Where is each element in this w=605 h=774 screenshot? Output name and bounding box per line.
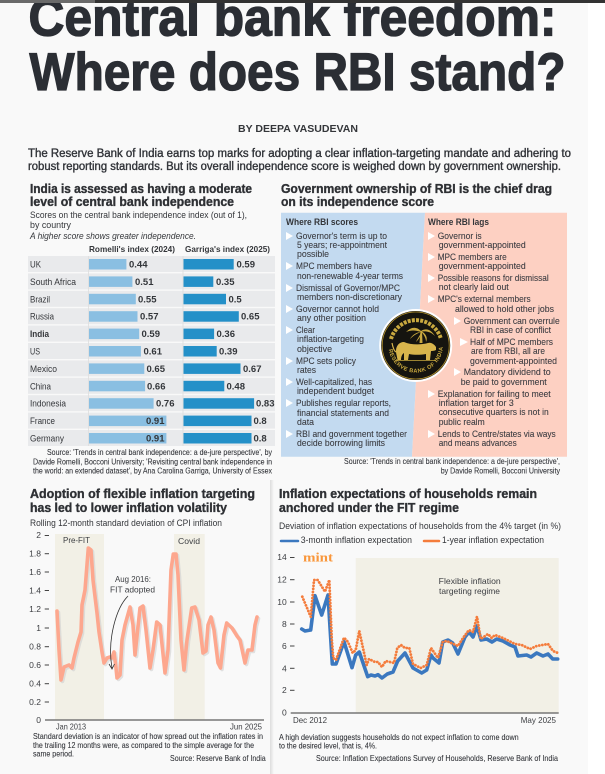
panel: where RBI scores: Governor cannot hold [296,304,379,315]
bar chart: country scores: 0.48 [226,381,245,392]
panel: where RBI scores: objective [297,344,332,355]
logo: mint: mint [303,550,334,564]
panel: where RBI lags: Where RBI lags [428,217,489,228]
line chart: CPI volatility: 1.8 [29,548,41,558]
panel: where RBI lags: are from RBI, all are [471,346,545,357]
callout: FIT adopted: Aug 2016: [115,574,151,584]
bar chart: country scores: 0.59 [236,260,255,270]
bar chart: country scores: South Africa [30,277,76,287]
panel: where RBI lags: Possible reasons for dismissal [438,273,549,284]
subtitle: Scores on the central bank independence index (out of 1), [30,210,247,220]
panel: where RBI scores [281,213,425,457]
heading: independence index: India is assessed as having a moderate [30,181,252,196]
panel: where RBI lags: not clearly laid out [439,282,509,293]
bar chart: country scores: Indonesia [30,399,66,409]
label: regime: targeting regime [439,586,500,596]
panel: where RBI lags: MPC members are [438,252,507,263]
panel: where RBI scores: members non-discretionary [297,292,402,303]
note: standard deviation: same period. [33,750,74,758]
line chart: CPI volatility: Pre-FIT [63,535,90,545]
note: standard deviation [33,732,263,758]
panel: where RBI scores: MPC members have [296,261,372,272]
column headers: Romelli's index (2024) [89,244,175,254]
source: index: Davide Romelli, Bocconi University; 'Revisiting central bank independence in [33,458,272,466]
callout: FIT adopted [110,574,155,595]
line chart: household expectations: 0 [282,707,287,717]
legend [281,535,544,545]
panel: where RBI lags: public realm [439,417,485,428]
panel: where RBI scores: Where RBI scores [286,217,358,228]
line chart: household expectations: May 2025 [521,715,556,725]
bar chart: country scores: 0.36 [216,329,235,340]
panel: where RBI lags: Government can overrule [464,316,560,327]
bar chart: country scores: China [30,381,51,391]
heading: independence index [30,181,252,209]
bar chart: country scores: Brazil [30,294,50,304]
panel: where RBI scores: Well-capitalized, has [296,377,372,388]
line chart: CPI volatility: 0.8 [29,642,41,652]
panel: inflation volatility [29,486,266,763]
bar chart: country scores [28,256,275,446]
line chart: household expectations: 12 [277,575,287,585]
panel: where RBI scores: 5 years; re-appointment [297,240,387,251]
line chart: household expectations: 8 [282,619,287,629]
bar chart: country scores: 0.66 [147,381,166,392]
bar chart: country scores: 0.65 [146,364,166,375]
note: high deviation: to the desired level, that is, 4%. [279,742,377,750]
panel: where RBI lags: government-appointed [439,261,526,272]
bar chart: country scores: 0.35 [216,277,235,288]
bar chart: country scores: 0.57 [140,312,158,323]
heading: government ownership: on its independence score [281,194,434,209]
panel: where RBI scores: Dismissal of Governor/MPC [296,283,400,294]
line chart: CPI volatility: 0 [36,715,41,725]
line chart: CPI volatility [29,530,264,732]
bar chart: country scores: 0.8 [254,416,267,427]
column headers: Garriga's index (2025) [185,244,270,254]
panel: where RBI scores: Clear [296,325,315,336]
bar chart: country scores: 0.91 [146,416,165,427]
source: index: Source: 'Trends in central bank independence: a de-jure perspective', by [47,448,272,457]
bar chart: country scores: Russia [30,312,54,322]
bar chart: country scores: 0.8 [254,434,267,444]
legend: 3-month inflation expectation [301,535,412,545]
panel: where RBI lags: Governor is [438,231,482,242]
intro text: robust reporting standards. But its overall independence score is weighed down by government ownership. [28,161,561,173]
source: ownership: by Davide Romelli, Bocconi University [441,467,560,476]
heading: inflation volatility: Adoption of flexible inflation targeting [30,486,255,501]
subtitle: A higher score shows greater independence. [29,231,196,241]
line chart: household expectations: 2 [282,685,287,695]
panel: where RBI lags: MPC's external members [438,294,531,305]
column headers [89,244,270,254]
source: survey: Source: Inflation Expectations Survey of Households, Reserve Bank of India [316,754,558,763]
byline: BY DEEPA VASUDEVAN [238,123,358,135]
icon: RBI emblem: RESERVE BANK OF INDIA [388,347,443,373]
bar chart: country scores: 0.5 [228,294,242,305]
bar chart: country scores: UK [30,260,41,270]
line chart: CPI volatility: 1.2 [29,604,41,614]
panel: where RBI lags: Half of MPC members [470,337,553,348]
line chart: CPI volatility: 1.4 [29,586,41,596]
subtitle: Deviation of inflation expectations of households from the 4% target (in %) [279,521,561,531]
source: index [33,448,272,476]
panel: independence index [28,181,275,476]
heading: government ownership: Government ownership of RBI is the chief drag [281,181,552,196]
heading: independence index: level of central bank independence [30,194,234,209]
callout: FIT adopted: FIT adopted [110,585,155,595]
line chart: CPI volatility: 2 [36,530,41,540]
icon: RBI emblem [379,309,452,382]
bar chart: country scores: 0.67 [243,364,262,375]
source: ownership: Source: 'Trends in central bank independence: a de-jure perspective', [344,457,560,466]
bar chart: country scores: US [30,346,40,356]
bar chart: country scores: 0.76 [156,399,174,410]
label: regime: Flexible inflation [439,576,501,586]
panel: where RBI scores: non-renewable 4-year terms [297,271,403,282]
note: high deviation: A high deviation suggests households do not expect inflation to come down [279,733,519,742]
panel: where RBI lags: and means advances [439,438,517,449]
panel: where RBI scores: RBI and government together [296,429,407,440]
intro text [28,148,571,173]
arrow: FIT adoption [109,596,128,669]
line chart: household expectations: 6 [282,641,287,651]
subtitle: Rolling 12-month standard deviation of CPI inflation [30,518,222,528]
subtitle: by country [30,220,71,230]
panel: where RBI lags: government-appointed [470,356,557,367]
panel: where RBI scores: MPC sets policy [296,356,356,367]
bar chart: country scores: 0.59 [142,329,160,340]
intro text: The Reserve Bank of India earns top marks for adopting a clear inflation-targeting mandate and adhering to [28,148,571,160]
panel: where RBI lags: inflation target for 3 [439,398,514,409]
line chart: CPI volatility: Covid [178,536,200,546]
source: index: the world: an extended dataset', by Ana Carolina Garriga, University of Essex [33,466,272,476]
panel: where RBI lags: be paid to government [461,377,547,388]
panel: where RBI lags: government-appointed [439,240,526,251]
panel: where RBI scores: rates [297,365,316,376]
bar chart: country scores: 0.39 [219,346,238,358]
bar chart: country scores: 0.44 [129,260,148,270]
note: high deviation [279,733,519,750]
heading: inflation expectations [279,486,537,515]
subtitle [29,210,247,241]
line chart: CPI volatility: 0.6 [29,660,41,670]
panel: where RBI lags: Explanation for failing to meet [438,389,551,400]
legend: 1-year inflation expectation [442,535,544,545]
bar chart: country scores: 0.83 [256,399,274,410]
panel: where RBI scores: inflation-targeting [297,334,364,345]
panel: where RBI scores: possible [297,249,329,260]
bar chart: country scores: India [30,329,50,339]
line chart: CPI volatility: 1 [36,623,41,633]
heading: inflation expectations: anchored under the FIT regime [279,500,459,515]
panel: where RBI lags: allowed to hold other jobs [455,304,554,315]
line chart: household expectations: Dec 2012 [293,715,327,725]
line chart: CPI volatility: Jan 2013 [56,722,86,732]
line chart: household expectations: 4 [282,663,287,673]
line chart: household expectations [277,552,559,725]
panel: where RBI scores: independent budget [297,386,374,397]
panel: inflation expectations [277,486,561,763]
title [28,0,566,102]
note: standard deviation: the trailing 12 months were, as compared to the simple average for the [33,741,254,750]
line chart: CPI volatility: 0.4 [29,678,41,688]
line chart: household expectations: 10 [277,597,287,607]
panel: where RBI lags: RBI in case of conflict [470,325,551,336]
source: ownership [344,457,560,476]
heading: government ownership [281,181,552,209]
heading: inflation expectations: Inflation expectations of households remain [279,486,537,501]
bar chart: country scores: 0.55 [138,294,157,305]
heading: inflation volatility: has led to lower inflation volatility [30,500,228,515]
line chart: CPI volatility: 0.2 [29,697,41,707]
panel: where RBI scores: Governor's term is up to [296,231,387,242]
panel: where RBI lags [412,213,567,457]
bar chart: country scores: 0.65 [241,312,260,323]
panel: where RBI scores: financial statements and [297,408,389,419]
panel: where RBI lags: Lends to Centre/states via ways [438,429,556,440]
panel: where RBI scores: decide borrowing limits [297,438,385,449]
heading: inflation volatility [30,486,255,515]
panel: where RBI scores: Publishes regular reports, [296,398,391,409]
note: standard deviation: Standard deviation is an indicator of how spread out the inflation rates in [33,732,263,741]
label: regime [439,576,501,596]
panel: where RBI scores: any other position [297,313,366,324]
line chart: household expectations: 14 [277,552,287,562]
line chart: CPI volatility: Jun 2025 [230,722,262,732]
bar chart: country scores: France [30,416,55,426]
bar chart: country scores: 0.51 [135,277,154,288]
bar chart: country scores: Mexico [30,364,57,374]
panel: government ownership [281,181,567,476]
bar chart: country scores: 0.91 [146,434,165,444]
bar chart: country scores: 0.61 [144,346,163,358]
source: RBI: Source: Reserve Bank of India [170,754,266,763]
line chart: CPI volatility: 1.6 [29,567,41,577]
panel: where RBI lags: consecutive quarters is not in [439,407,549,418]
panel: where RBI lags: Mandatory dividend to [464,367,551,378]
panel: where RBI scores: data [297,417,315,428]
bar chart: country scores: Germany [30,434,64,444]
